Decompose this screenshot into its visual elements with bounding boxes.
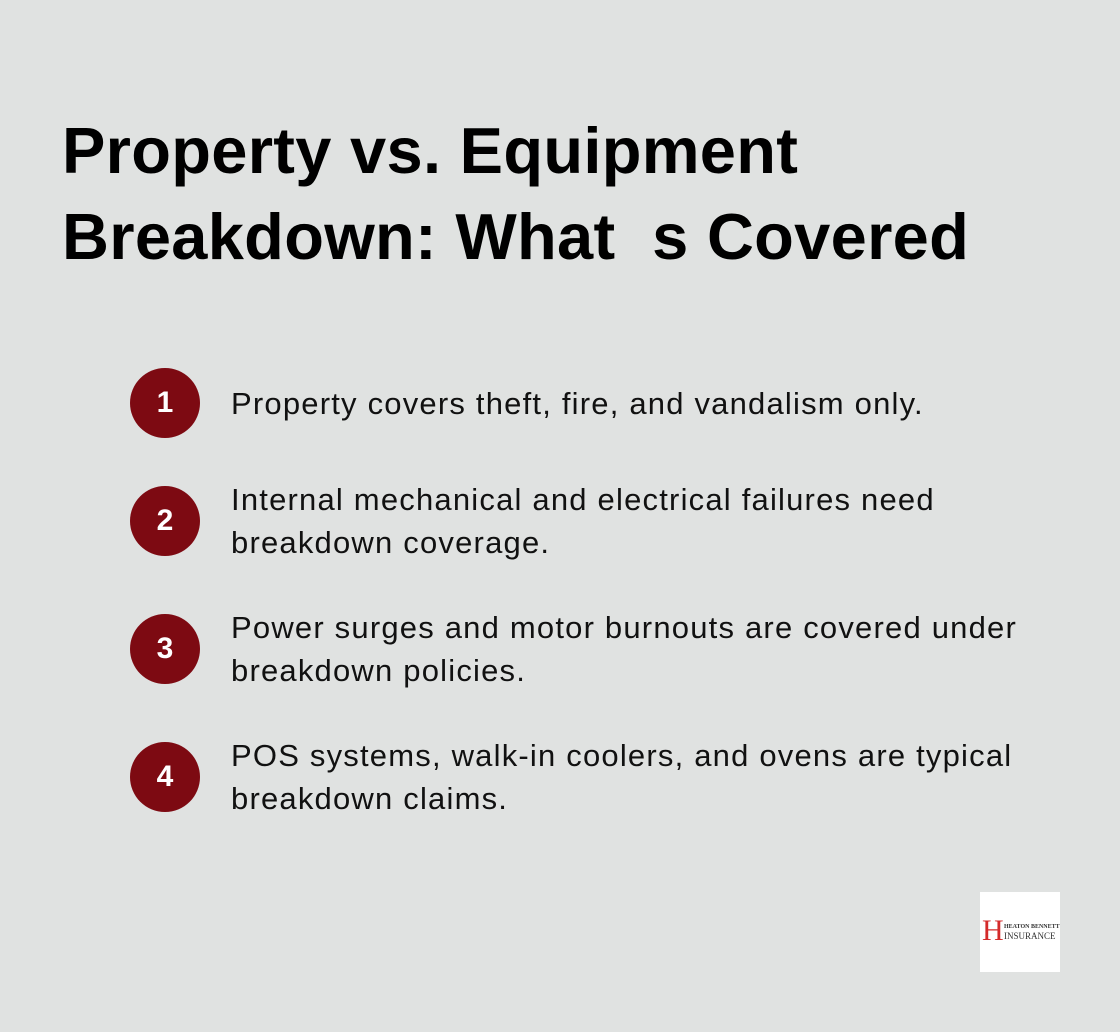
logo: H — [982, 914, 1004, 947]
item 4 — [130, 738, 1012, 816]
item 2: breakdown coverage. — [231, 525, 550, 560]
item 2 — [130, 482, 935, 560]
title: Breakdown: What s Covered — [62, 200, 969, 273]
item 3: 3 — [157, 632, 173, 665]
item 3: breakdown policies. — [231, 653, 526, 688]
item 4: POS systems, walk-in coolers, and ovens are typical — [231, 738, 1012, 773]
logo: HEATON BENNETT — [1004, 924, 1060, 930]
title: Property vs. Equipment — [62, 114, 798, 187]
item 1: 1 — [157, 386, 173, 419]
logo: INSURANCE — [1004, 931, 1056, 941]
item 1: Property covers theft, fire, and vandalism only. — [231, 386, 924, 421]
logo — [980, 892, 1060, 972]
item 2: 2 — [157, 504, 173, 537]
item 4: breakdown claims. — [231, 781, 508, 816]
item 2: Internal mechanical and electrical failures need — [231, 482, 935, 517]
item 4: 4 — [157, 760, 173, 793]
item 3: Power surges and motor burnouts are covered under — [231, 610, 1017, 645]
item 3 — [130, 610, 1017, 688]
title — [62, 114, 969, 273]
item 1 — [130, 368, 924, 438]
